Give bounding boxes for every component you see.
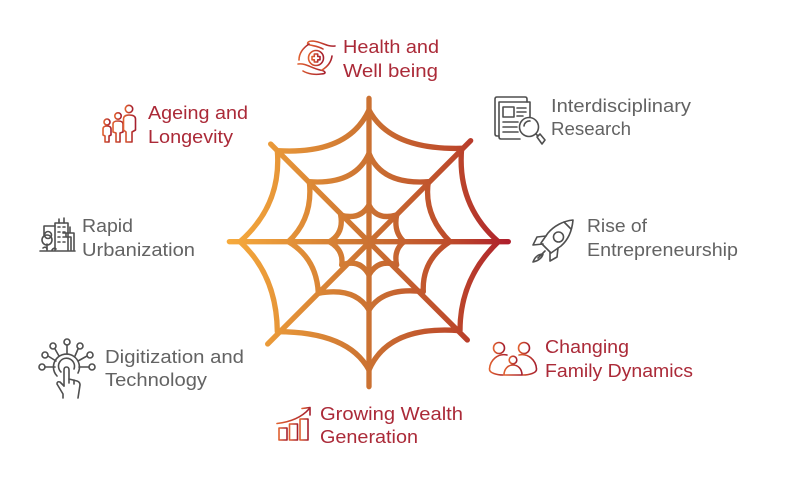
icon: document and magnifier (495, 97, 545, 144)
label: Ageing and (148, 102, 248, 123)
item: Ageing and Longevity (103, 102, 248, 147)
item: Changing Family Dynamics (489, 336, 693, 381)
web inner ring (329, 205, 404, 275)
item: Health and Well being: Well being (343, 60, 438, 81)
item: Digitization and Technology (39, 339, 244, 398)
item: Rise of Entrepreneurship (533, 215, 738, 262)
label: Health and (343, 36, 439, 57)
label: Rapid (82, 215, 133, 236)
spider web diagram (229, 98, 508, 387)
web spokes (229, 98, 508, 387)
label: Rise of (587, 215, 648, 236)
web outer ring (240, 110, 498, 370)
icon: rising bar chart (277, 408, 310, 440)
label: Changing (545, 336, 629, 357)
item: Growing Wealth Generation: Generation (320, 426, 418, 447)
web middle ring (288, 153, 450, 310)
item: Growing Wealth Generation (277, 403, 463, 447)
icon: rocket (533, 220, 573, 262)
item: Rise of Entrepreneurship: Entrepreneurship (587, 239, 738, 260)
item: Changing Family Dynamics: Family Dynamics (545, 360, 693, 381)
item: Ageing and Longevity: Longevity (148, 126, 234, 147)
item: Rapid Urbanization: Urbanization (82, 239, 195, 260)
item: Interdisciplinary Research (495, 95, 692, 144)
label: Digitization and (105, 346, 244, 367)
icon: three people (103, 105, 136, 142)
item: Digitization and Technology: Technology (105, 369, 208, 390)
item: Rapid Urbanization (40, 215, 195, 260)
label: Interdisciplinary (551, 95, 692, 116)
item: Health and Well being (298, 36, 439, 81)
icon: hands holding cross (298, 41, 335, 74)
item: Interdisciplinary Research: Research (551, 118, 631, 139)
label: Growing Wealth (320, 403, 463, 424)
icon: hand touching network (39, 339, 95, 398)
icon: family (489, 342, 537, 375)
icon: city buildings (40, 218, 75, 251)
